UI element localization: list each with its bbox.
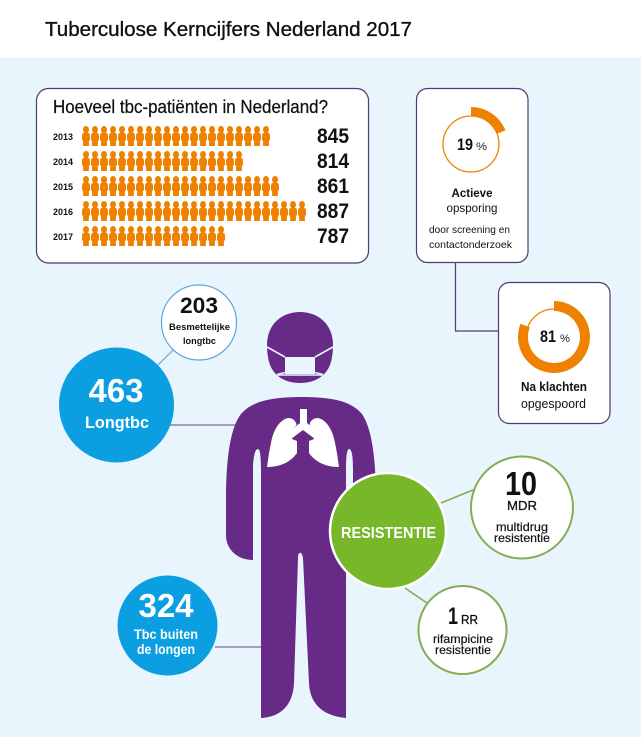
circle: pulmonary tb (59, 348, 174, 462)
circle: rifampicin resistance: resistentie (435, 643, 491, 657)
connector lines from circles (158, 350, 473, 647)
row 2017: 787 (317, 224, 349, 248)
row 2015: 2015 (53, 182, 73, 192)
panel: patient counts per year (36, 88, 368, 263)
row 2014 (53, 149, 349, 173)
active detection label: opsporing (446, 201, 498, 215)
active detection label: door screening en (429, 224, 510, 236)
row 2016 (53, 199, 349, 223)
panel heading: Hoeveel tbc-patiënten in Nederland? (53, 97, 328, 117)
circle: multidrug resistance: multidrug (496, 520, 548, 534)
active detection label: contactonderzoek (429, 239, 513, 251)
panel: active detection (416, 88, 528, 262)
row 2017: 2017 (53, 232, 73, 242)
donut chart 81%: % (560, 333, 570, 345)
row 2013: 2013 (53, 132, 73, 142)
row 2013: 845 (317, 124, 349, 148)
donut chart 19%: 19 (457, 135, 473, 154)
row 2016: 887 (317, 199, 349, 223)
connector between detection panels (456, 262, 498, 331)
body (226, 397, 376, 718)
circle: pulmonary tb: Longtbc (85, 413, 149, 432)
circle: resistance: RESISTENTIE (341, 525, 436, 542)
circle: multidrug resistance: MDR (507, 498, 537, 513)
circle: resistance (330, 473, 446, 589)
donut chart 81%: 81 (540, 327, 556, 346)
row 2014: 2014 (53, 157, 73, 167)
circle: multidrug resistance: resistentie (494, 531, 550, 545)
circle: extrapulmonary tb: Tbc buiten (134, 626, 198, 642)
row 2013 (53, 124, 349, 148)
row 2016: 2016 (53, 207, 73, 217)
circle: multidrug resistance: 10 (505, 465, 537, 502)
row 2017 (53, 224, 349, 248)
head with face mask (267, 312, 333, 383)
complaints label: opgespoord (521, 396, 586, 411)
row 2014: 814 (317, 149, 349, 173)
circle: multidrug resistance (471, 456, 573, 558)
circle: extrapulmonary tb: de longen (137, 641, 195, 657)
complaints label: Na klachten (521, 379, 587, 394)
circle: rifampicin resistance: 1 (448, 603, 458, 630)
donut chart 19% (443, 107, 505, 172)
active detection label: Actieve (452, 186, 493, 200)
circle: rifampicin resistance: RR (461, 612, 478, 627)
donut chart 81% (518, 301, 590, 373)
row 2015: 861 (317, 174, 349, 198)
circle: extrapulmonary tb: 324 (138, 587, 194, 624)
circle: contagious pulmonary tb: Besmettelijke (169, 322, 230, 333)
circle: contagious pulmonary tb: 203 (180, 293, 218, 318)
donut chart 19%: % (476, 141, 487, 153)
circle: rifampicin resistance: rifampicine (433, 632, 493, 646)
person figure (226, 312, 376, 718)
complaints label (521, 379, 587, 411)
panel: detected after complaints (498, 282, 610, 424)
title: Tuberculose Kerncijfers Nederland 2017 (45, 19, 412, 41)
circle: contagious pulmonary tb (162, 285, 236, 360)
circle: extrapulmonary tb (118, 576, 218, 676)
active detection label (429, 186, 513, 251)
lungs (267, 409, 339, 467)
circle: pulmonary tb: 463 (88, 372, 144, 409)
circle: rifampicin resistance (418, 586, 506, 674)
row 2015 (53, 174, 349, 198)
circle: contagious pulmonary tb: longtbc (183, 336, 216, 347)
